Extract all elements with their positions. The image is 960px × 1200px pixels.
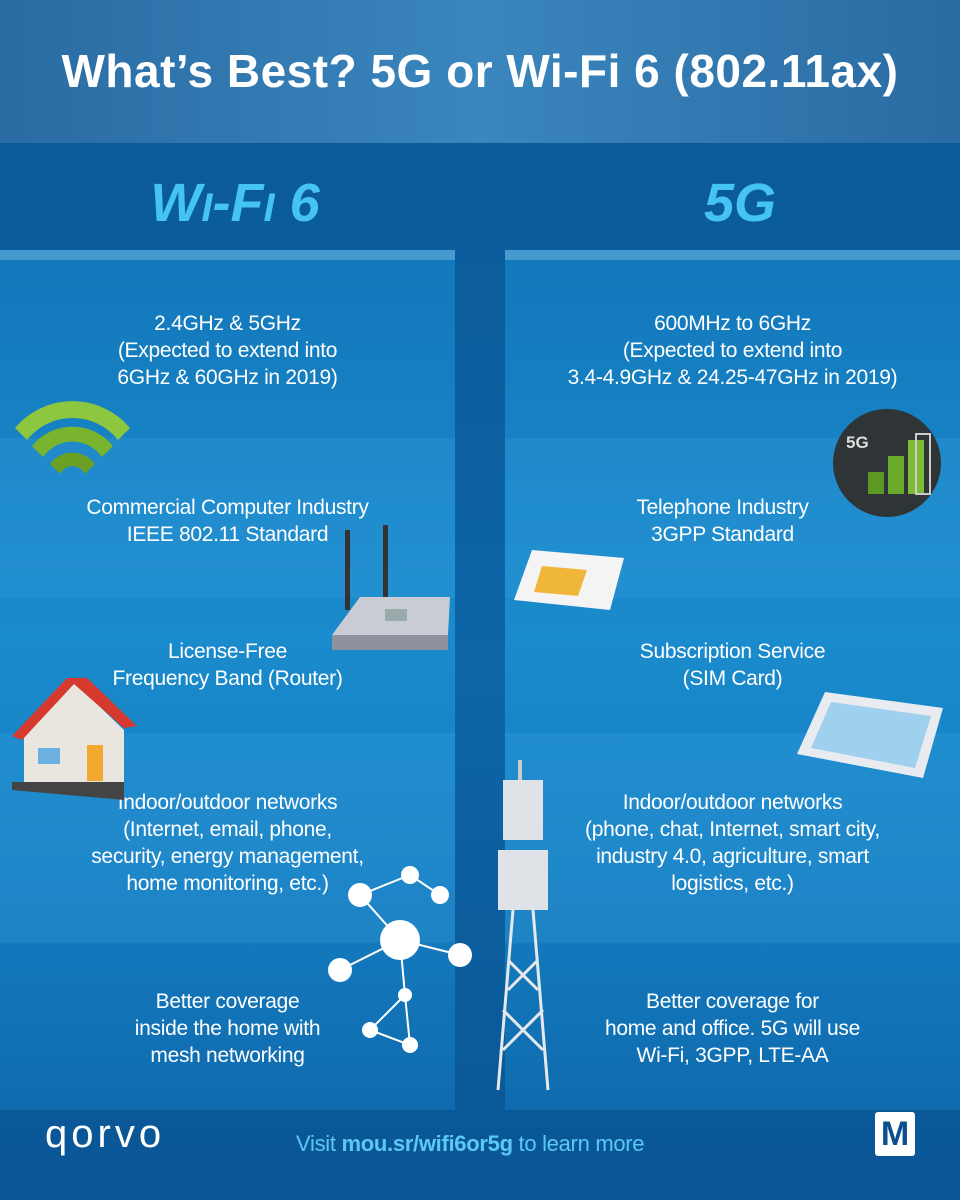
panel: Wi-Fi 6 column (0, 250, 455, 1110)
text: 5G frequency: (Expected to extend into (623, 339, 842, 362)
text: wifi coverage: inside the home with (135, 1017, 320, 1040)
text: wifi networks: home monitoring, etc.) (126, 872, 329, 895)
icon: SIM card (514, 550, 624, 610)
text: wifi coverage (135, 990, 320, 1067)
header band (0, 0, 960, 143)
text: 5G coverage: Wi-Fi, 3GPP, LTE-AA (637, 1044, 828, 1067)
text: wifi industry (86, 496, 369, 546)
title: What’s Best? 5G or Wi-Fi 6 (802.11ax) (62, 45, 898, 97)
text: 5G frequency (568, 312, 897, 389)
text: wifi license (112, 640, 343, 690)
logo: qorvo: qorvo (45, 1112, 165, 1156)
text: 5G networks: (phone, chat, Internet, smart city, (585, 818, 880, 841)
icon: house (12, 678, 137, 800)
text: 5G coverage: Better coverage for (646, 990, 819, 1013)
text: 5G subscription (640, 640, 825, 690)
footer link text: Visit mou.sr/wifi6or5g to learn more (296, 1131, 644, 1156)
text: 5G frequency: 600MHz to 6GHz (654, 312, 811, 335)
text: wifi coverage: mesh networking (150, 1044, 305, 1067)
icon: cell tower (496, 760, 550, 1090)
text: 5G frequency: 3.4-4.9GHz & 24.25-47GHz in 2019) (568, 366, 897, 389)
text: wifi frequency (117, 312, 338, 389)
icon: tablet (797, 692, 943, 778)
text: wifi networks: Indoor/outdoor networks (118, 791, 337, 814)
logo: Mouser M: M (881, 1115, 909, 1153)
panel: 5G column (505, 250, 960, 1110)
text: wifi frequency: 2.4GHz & 5GHz (154, 312, 301, 335)
text: 5G subscription: Subscription Service (640, 640, 825, 663)
text: wifi industry: Commercial Computer Industry (86, 496, 369, 519)
text: wifi frequency: (Expected to extend into (118, 339, 337, 362)
text: wifi coverage: Better coverage (156, 990, 299, 1013)
text: wifi frequency: 6GHz & 60GHz in 2019) (117, 366, 338, 389)
text: 5G coverage: home and office. 5G will use (605, 1017, 860, 1040)
text: wifi networks (91, 791, 364, 895)
text: wifi license: License-Free (168, 640, 287, 663)
text: 5G subscription: (SIM Card) (683, 667, 782, 690)
text: 5G networks: logistics, etc.) (671, 872, 794, 895)
icon: mesh network (328, 866, 472, 1053)
text: wifi industry: IEEE 802.11 Standard (127, 523, 328, 546)
icon: wifi signal (15, 401, 130, 474)
text: wifi networks: security, energy management, (91, 845, 364, 868)
text: 5G industry: 3GPP Standard (651, 523, 794, 546)
text: 5G coverage (605, 990, 860, 1067)
logo: Mouser M (875, 1112, 915, 1156)
icon: 5G signal badge (833, 409, 941, 517)
heading: Wi-Fi 6: WI-FI 6 (150, 173, 320, 233)
icon: 5G signal badge: 5G (846, 433, 869, 452)
text: 5G networks (585, 791, 880, 895)
text: 5G industry (636, 496, 809, 546)
text: 5G networks: industry 4.0, agriculture, smart (596, 845, 869, 868)
text: wifi networks: (Internet, email, phone, (123, 818, 332, 841)
icon: router (332, 525, 450, 650)
heading: 5G: 5G (704, 173, 776, 233)
text: 5G networks: Indoor/outdoor networks (623, 791, 842, 814)
text: 5G industry: Telephone Industry (636, 496, 809, 519)
text: wifi license: Frequency Band (Router) (112, 667, 343, 690)
